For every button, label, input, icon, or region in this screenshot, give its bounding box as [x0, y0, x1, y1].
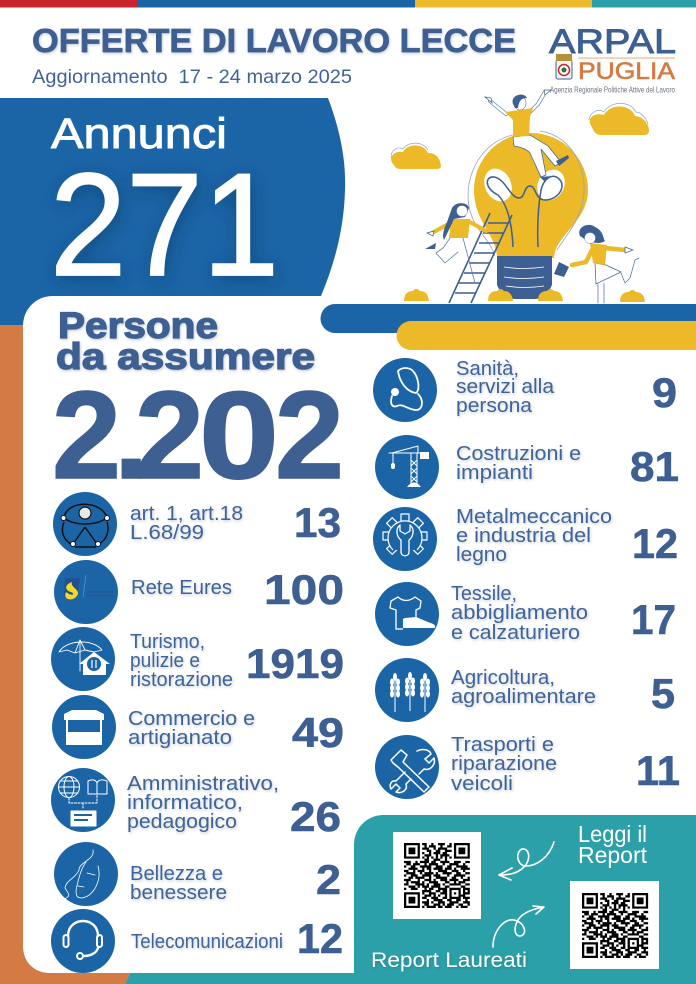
icon: headset	[51, 909, 115, 973]
number: 2.202: 0	[199, 366, 279, 505]
text	[128, 707, 255, 749]
bottom background: teal strip	[125, 973, 696, 984]
text: pulizie e	[130, 649, 200, 672]
bushes	[404, 289, 645, 302]
text: Tessile,	[451, 582, 517, 605]
text: Telecomunicazioni	[131, 930, 283, 953]
text: Bellezza e	[130, 862, 223, 885]
arrow: to second QR	[493, 906, 544, 947]
text	[130, 862, 227, 904]
panel: persone da assumere	[23, 296, 354, 973]
item: Metalmeccanico	[373, 505, 678, 571]
text: impianti	[456, 461, 533, 484]
QR code: Laureati	[570, 881, 659, 969]
value: 100	[264, 566, 344, 613]
text: e calzaturiero	[451, 621, 580, 644]
item: art. 1, art.18	[53, 492, 341, 556]
item: Sanità	[373, 357, 677, 422]
illustration: light bulb with people	[391, 90, 649, 303]
panel: annunci	[0, 98, 345, 325]
value: 13	[294, 499, 341, 546]
number: 2.202: 2.2	[52, 367, 204, 505]
value: 26	[290, 793, 341, 840]
item: Trasporti	[375, 733, 680, 799]
panel: QR codes	[354, 815, 696, 973]
icon: tower crane	[375, 435, 439, 499]
icon: globe, book, screen	[51, 768, 115, 832]
icon: accessibility figure	[53, 492, 117, 556]
label: Annunci: Annunci	[51, 110, 227, 158]
item: Bellezza	[54, 842, 341, 906]
item: Commercio	[52, 695, 344, 759]
text	[130, 630, 233, 691]
value: 1919	[246, 640, 344, 687]
text: riparazione	[451, 752, 557, 775]
list: right sectors	[373, 357, 680, 799]
panel: blue pill	[320, 304, 696, 333]
item: Telecomunicazioni	[51, 909, 343, 973]
value: 49	[292, 709, 344, 756]
text: benessere	[130, 881, 227, 904]
value: 9	[652, 369, 677, 416]
text: artigianato	[128, 726, 232, 749]
icon: stethoscope	[373, 358, 437, 422]
label: Leggi il Report: Report	[578, 842, 648, 868]
text: persona	[456, 394, 533, 417]
logo: ARPAL Puglia: ARPAL	[549, 23, 676, 61]
text	[456, 357, 555, 417]
text: abbigliamento	[451, 601, 588, 624]
value: 12	[297, 915, 343, 962]
item: Tessile	[375, 582, 676, 646]
value: 5	[651, 670, 675, 717]
text: e industria del	[456, 524, 591, 547]
title: OFFERTE DI LAVORO LECCE	[32, 22, 516, 59]
heading: Persone da assumere: Persone	[58, 305, 218, 346]
icon: t-shirt and shoe	[375, 582, 439, 646]
value: 2	[316, 856, 341, 903]
person with watering can	[554, 225, 639, 303]
icon: wheat ears	[375, 658, 439, 722]
text: agroalimentare	[451, 685, 596, 708]
text: veicoli	[451, 772, 513, 795]
person on ladder	[425, 203, 486, 283]
text: Sanità,	[456, 357, 519, 380]
value: 81	[630, 443, 679, 490]
number: 2.202	[52, 366, 344, 505]
item: Agricoltura	[375, 658, 675, 722]
arrow: to first QR	[499, 842, 554, 880]
ladder	[449, 213, 512, 303]
item: Turismo	[51, 627, 344, 691]
label: Report Laureati: Report Laureati	[371, 948, 527, 972]
value: 12	[632, 520, 678, 567]
value: 11	[636, 747, 680, 794]
text: Turismo,	[130, 630, 205, 653]
icon: face	[54, 842, 118, 906]
text: Commercio e	[128, 707, 255, 730]
person on top	[485, 90, 569, 181]
icon: gear and wrench	[373, 507, 437, 571]
subtitle: update date: Aggiornamento 17 - 24 marzo 2025	[32, 66, 352, 88]
text	[456, 505, 612, 566]
text: Metalmeccanico	[456, 505, 612, 528]
text: Agricoltura,	[451, 666, 555, 689]
heading: Persone da assumere: da assumere	[56, 336, 315, 377]
text	[456, 442, 581, 484]
text: Trasporti e	[451, 733, 554, 756]
bulb	[474, 133, 588, 258]
QR code: Report	[393, 832, 481, 919]
number: 2.202: 2	[275, 367, 344, 505]
top colour bar	[0, 0, 696, 8]
label: Leggi il Report: Leggi il	[578, 821, 647, 847]
text: art. 1, art.18	[130, 502, 243, 525]
panel: yellow pill	[396, 321, 696, 350]
item: Rete Eures	[54, 560, 344, 624]
text: Amministrativo,	[127, 772, 279, 795]
text: legno	[456, 543, 507, 566]
label: Leggi il Report	[578, 821, 648, 868]
item: Amministrativo	[51, 768, 341, 840]
clouds	[391, 106, 649, 169]
icon: umbrella and house	[51, 627, 115, 691]
text: servizi alla	[456, 375, 555, 398]
list: left sectors	[51, 492, 344, 973]
heading: Persone da assumere	[56, 305, 315, 377]
icon: market stall	[52, 695, 116, 759]
text	[451, 733, 557, 795]
logo: ARPAL Puglia	[549, 23, 676, 94]
text: Costruzioni e	[456, 442, 581, 465]
side background: orange strip	[0, 320, 130, 984]
icon: hammer and wrench	[375, 735, 439, 799]
text: pedagogico	[127, 810, 237, 833]
item: Costruzioni	[375, 435, 679, 499]
text	[130, 502, 243, 544]
text	[451, 666, 596, 708]
number: 271: 271	[50, 143, 279, 306]
value: 17	[631, 596, 676, 643]
icon: Eures logo	[54, 560, 118, 624]
text: ristorazione	[130, 668, 233, 691]
text: informatico,	[127, 791, 243, 814]
logo: ARPAL Puglia: PUGLIA	[578, 58, 675, 85]
text: L.68/99	[130, 521, 204, 544]
text	[451, 582, 588, 644]
text: Rete Eures	[131, 576, 232, 599]
text	[127, 772, 279, 833]
